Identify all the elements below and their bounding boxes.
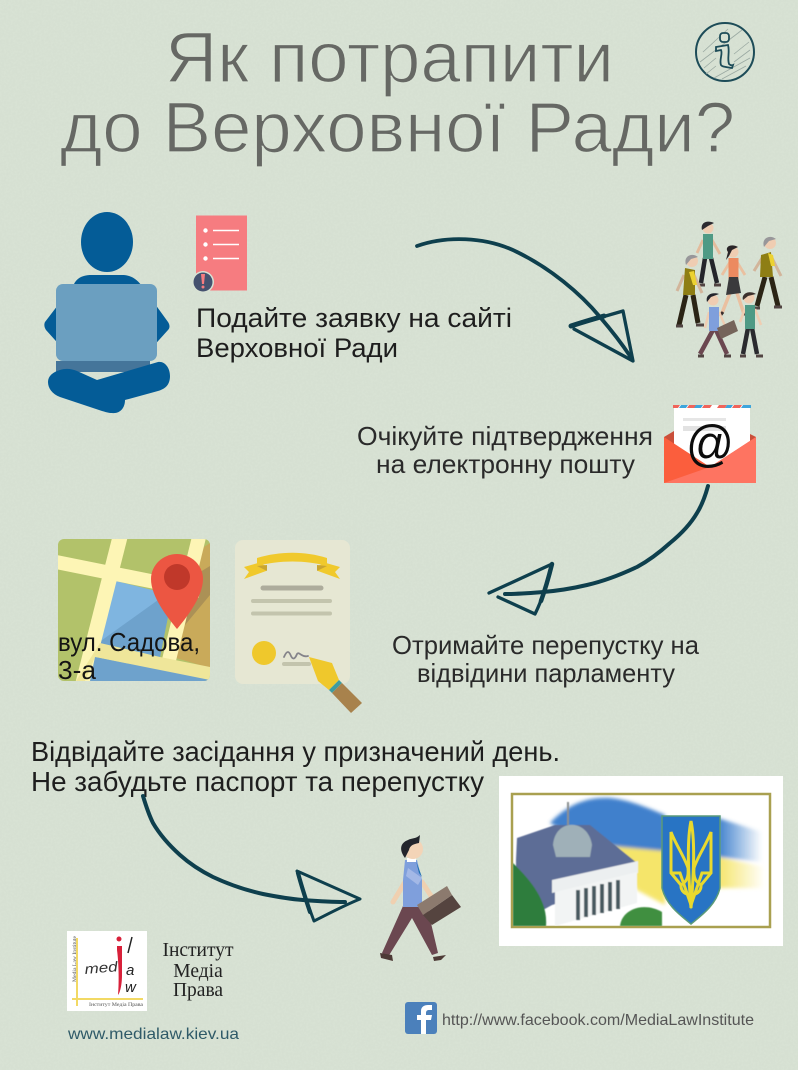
step 1 text: Подайте заявку на сайті — [196, 303, 512, 333]
step 3 text — [392, 630, 700, 688]
seal — [252, 641, 276, 665]
icon: group of people — [676, 222, 782, 356]
icon: info — [696, 23, 754, 81]
step 3 text: відвідини парламенту — [417, 658, 675, 688]
title — [60, 19, 735, 168]
title: Як потрапити — [165, 19, 614, 98]
step 4 text: Не забудьте паспорт та перепустку — [31, 766, 484, 797]
institute name: Інститут — [162, 940, 234, 961]
icon: person with laptop — [44, 212, 170, 413]
step 2 text — [357, 421, 653, 479]
step 4 text: Відвідайте засідання у призначений день. — [31, 736, 560, 767]
step 3 text: Отримайте перепустку на — [392, 630, 700, 660]
building — [515, 824, 636, 910]
arrow 2 — [489, 486, 708, 614]
map blue block — [102, 581, 167, 657]
step 1 text: Верховної Ради — [196, 333, 398, 363]
person top — [697, 222, 721, 285]
website link: www.medialaw.kiev.ua — [67, 1026, 239, 1043]
logo wordmark — [84, 936, 137, 996]
logo: Media Law Institute: Інститут Медіа Права — [89, 1003, 144, 1008]
institute name: Медіа — [173, 961, 223, 982]
flag — [550, 798, 765, 905]
map pin — [151, 554, 203, 629]
logo wordmark: med — [84, 958, 120, 977]
icon: walking man with briefcase — [380, 835, 461, 961]
arrow 1 — [417, 239, 633, 361]
icon: application document — [192, 216, 247, 293]
icon: map with pin — [56, 537, 210, 685]
address: вул. Садова, — [58, 627, 200, 657]
logo: Media Law Institute: Media Law Institute — [73, 935, 78, 982]
arrow 3 — [143, 796, 360, 921]
logo wordmark: w — [125, 979, 137, 996]
address: 3-а — [58, 655, 97, 685]
parliament image — [499, 776, 783, 946]
step 4 text — [31, 736, 560, 797]
icon: envelope with at sign — [664, 405, 756, 483]
address — [58, 627, 200, 685]
step 2 text: Очікуйте підтвердження — [357, 421, 653, 451]
institute name: Права — [173, 980, 223, 1001]
title: до Верховної Ради? — [60, 89, 735, 168]
pen — [309, 657, 339, 690]
trident shield — [662, 816, 720, 924]
step 2 text: на електронну пошту — [376, 449, 635, 479]
laptop — [56, 284, 157, 361]
icon: pass certificate with pen — [235, 540, 362, 713]
icon: facebook — [405, 1002, 437, 1034]
person grey left — [676, 255, 704, 326]
person green — [740, 292, 763, 356]
step 1 text — [196, 303, 512, 363]
person woman — [720, 245, 745, 316]
icon: envelope with at sign: @ — [686, 415, 734, 472]
facebook link: http://www.facebook.com/MediaLawInstitute — [442, 1012, 754, 1029]
ribbon — [257, 553, 327, 566]
logo: Media Law Institute — [67, 931, 147, 1011]
institute name — [162, 940, 234, 1001]
person grey right — [753, 237, 782, 308]
person with briefcase — [698, 293, 738, 356]
logo wordmark: a — [126, 962, 134, 979]
